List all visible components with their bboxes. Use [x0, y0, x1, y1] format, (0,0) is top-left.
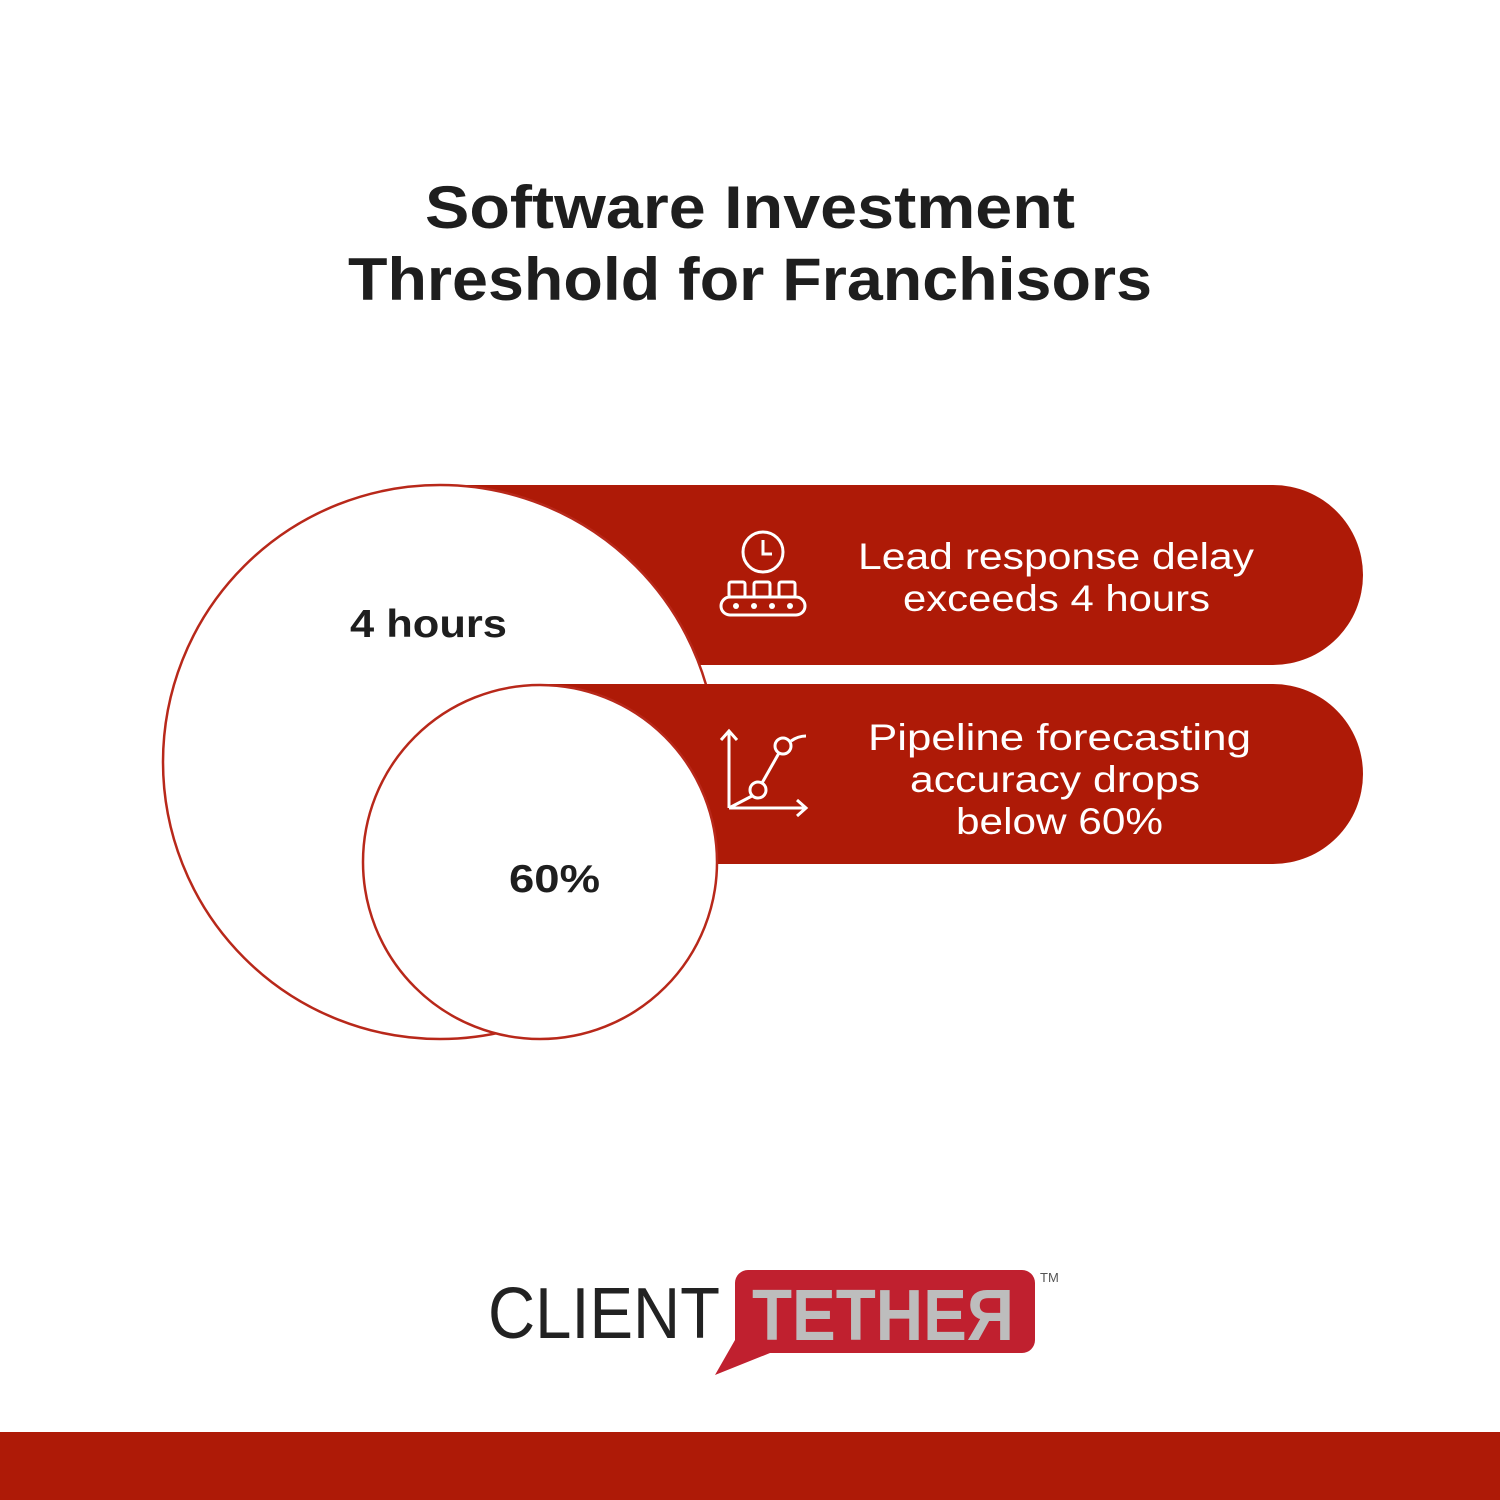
small circle: 60%: [363, 685, 717, 1039]
bar: lead response: Lead response delay: [858, 536, 1255, 577]
title: Software Investment: [425, 174, 1075, 241]
bar: pipeline forecasting: Pipeline forecasting: [868, 717, 1251, 758]
bar: lead response: exceeds 4 hours: [903, 578, 1210, 619]
title: Threshold for Franchisors: [348, 246, 1152, 313]
big circle: 4 hours: 4 hours: [350, 603, 507, 646]
icon: chart: [721, 731, 806, 816]
small circle: 60%: 60%: [509, 858, 600, 901]
bar: pipeline forecasting: below 60%: [956, 801, 1163, 842]
logo: CLIENT: [488, 1274, 720, 1354]
title: [348, 174, 1152, 313]
logo: TM: [1040, 1270, 1059, 1285]
bar: pipeline forecasting: accuracy drops: [910, 759, 1200, 800]
bar: lead response: [440, 485, 1363, 665]
logo: TETHEЯ: [752, 1276, 1014, 1356]
bar: pipeline forecasting: [540, 684, 1363, 864]
footer bar: [0, 1432, 1500, 1500]
big circle: 4 hours: [163, 485, 717, 1039]
icon: clock conveyor: [721, 532, 805, 615]
logo: [488, 1270, 1059, 1375]
